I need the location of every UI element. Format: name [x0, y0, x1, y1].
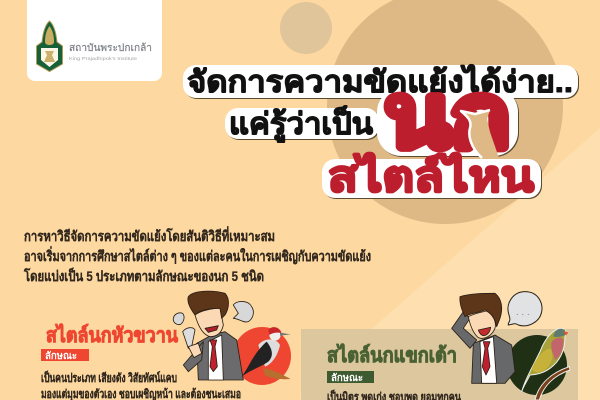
- intro text: การหาวิธีจัดการความขัดแย้งโดยสันติวิธีที่เหมาะสม: [24, 226, 275, 244]
- title line 2: แค่รู้ว่าเป็น: [229, 105, 374, 143]
- panel body text: เป็นคนประเภท เสียงดัง วิสัยทัศน์แคบ: [41, 370, 177, 385]
- logo subtitle: King Prajadhipok's Institute: [69, 56, 138, 61]
- icon: businessman angry: [183, 291, 243, 380]
- icon: dark green circle: [507, 335, 567, 395]
- icon: businessman laughing: [452, 293, 515, 383]
- big background circle: [327, 0, 563, 224]
- logo name: สถาบันพระปกเกล้า: [69, 42, 152, 54]
- intro text: อาจเริ่มจากการศึกษาสไตล์ต่าง ๆ ของแต่ละคนในการเผชิญกับความขัดแย้ง: [24, 246, 371, 265]
- panel heading: สไตล์นกแขกเต้า: [327, 343, 457, 367]
- title sticker backing: [183, 65, 578, 198]
- panel: parakeet style: [301, 292, 578, 400]
- small background circle: [280, 2, 332, 54]
- label tag: ลักษณะ: [45, 350, 77, 362]
- label tag: [41, 349, 89, 362]
- title line 1: จัดการความขัดแย้งได้ง่าย..: [187, 64, 573, 99]
- panel body text: [41, 370, 241, 400]
- icon: speech bubble: ...: [516, 307, 533, 317]
- panel heading: สไตล์นกหัวขวาน: [46, 323, 178, 347]
- label tag: ลักษณะ: [331, 372, 363, 384]
- logo card: [27, 0, 162, 81]
- title line 3: สไตล์ไหน: [328, 152, 534, 200]
- icon: smoke puffs: [173, 301, 253, 325]
- icon: parakeet on branch: [522, 328, 570, 400]
- panel: woodpecker style: [41, 291, 291, 400]
- icon: institute crest: [36, 21, 62, 72]
- icon: woodpecker: [242, 327, 291, 379]
- label tag: [327, 371, 374, 384]
- icon: bird silhouette in title: [461, 110, 499, 158]
- intro text: [23, 226, 371, 284]
- icon: speech bubble: [508, 292, 542, 326]
- intro text: โดยแบ่งเป็น 5 ประเภทตามลักษณะของนก 5 ชนิด: [23, 267, 264, 284]
- title big word: นก: [385, 69, 510, 165]
- title sticker shadow: [184, 66, 579, 199]
- panel background: [301, 329, 578, 400]
- title: [183, 64, 579, 200]
- icon: red circle: [233, 327, 291, 385]
